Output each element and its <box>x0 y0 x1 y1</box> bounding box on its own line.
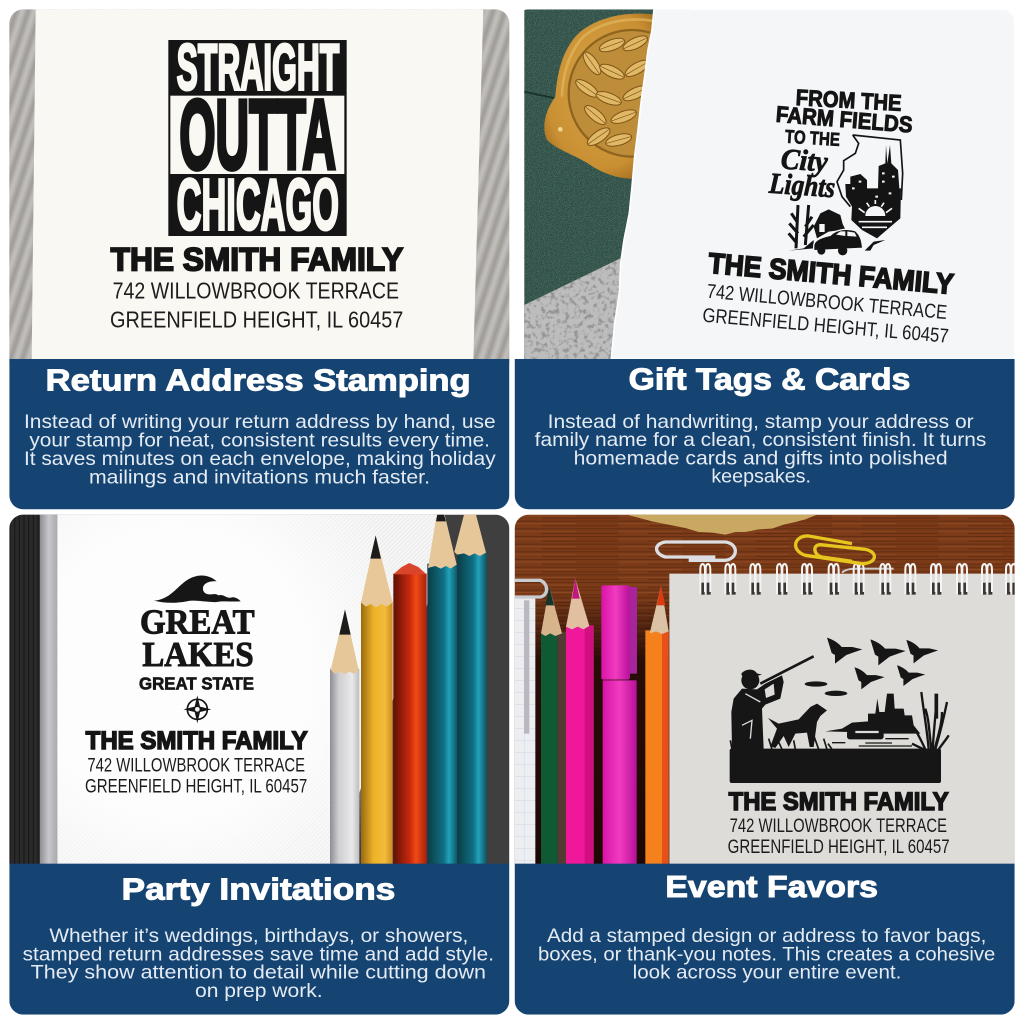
body text: They show attention to detail while cutting down <box>31 963 486 984</box>
body text: your stamp for neat, consistent results every time. <box>29 431 490 452</box>
stamp text: family name and address: THE SMITH FAMILY <box>111 240 404 277</box>
caption band <box>9 359 509 509</box>
icon: compass rose <box>183 695 211 723</box>
illustration: reeds and grass <box>730 692 949 749</box>
stamp text: family name and address: THE SMITH FAMILY <box>707 248 955 301</box>
icon: gold wax seal <box>544 14 653 179</box>
body text: mailings and invitations much faster. <box>89 467 430 488</box>
stamp graphic: hunter, dog and skyline <box>730 638 949 783</box>
icon: orange pencil <box>645 586 669 865</box>
illustration: illinois outline with skyline <box>837 135 903 238</box>
caption band <box>9 864 509 1015</box>
illustration: skyline and boat <box>825 694 920 746</box>
body text <box>538 926 995 984</box>
stamp text: family name and address: 742 WILLOWBROOK TERRACE <box>730 816 947 837</box>
body text: Instead of handwriting, stamp your address or <box>548 412 974 433</box>
stamp text: family name and address: GREENFIELD HEIGHT, IL 60457 <box>702 305 950 348</box>
heading: Event Favors <box>665 870 878 904</box>
body text: family name for a clean, consistent finish. It turns <box>535 430 986 451</box>
stamp graphic: straight outta chicago: OUTTA <box>179 80 336 190</box>
small clip behind rings <box>842 569 894 573</box>
icon: wave <box>154 575 241 603</box>
body text: look across your entire event. <box>633 963 901 984</box>
stamp graphic: farm fields to city lights: City <box>780 143 830 179</box>
stamp text: family name and address: 742 WILLOWBROOK TERRACE <box>706 281 948 324</box>
stamp text: family name and address: 742 WILLOWBROOK TERRACE <box>87 755 305 776</box>
photo: notebook paper and pencils <box>9 515 509 865</box>
stamp text: family name and address: GREENFIELD HEIGHT, IL 60457 <box>110 306 403 332</box>
stamp graphic: farm fields to city lights: FARM FIELDS <box>775 101 914 138</box>
caption band <box>515 864 1015 1015</box>
illustration: hunter with rifle <box>731 656 814 749</box>
heading: Party Invitations <box>122 872 395 906</box>
icon: white paperclip <box>657 542 735 560</box>
photo: notebook on wood desk <box>515 515 1016 865</box>
body text: Whether it’s weddings, birthdays, or showers, <box>49 926 468 947</box>
stamp graphic: straight outta chicago: STRAIGHT <box>177 30 339 103</box>
illustration: flying geese <box>805 638 938 696</box>
body text: keepsakes. <box>711 467 811 488</box>
stamp text: family name and address: 742 WILLOWBROOK TERRACE <box>113 277 399 303</box>
icon: red pencil <box>393 563 427 865</box>
body text <box>23 926 494 1002</box>
icon: pink pencil <box>566 579 594 865</box>
body text: Add a stamped design or address to favor bags, <box>547 926 986 947</box>
panel: party invitations <box>9 515 509 1015</box>
body text <box>535 412 986 488</box>
body text: stamped return addresses save time and add style. <box>23 944 494 965</box>
stamp graphic: straight outta chicago <box>168 30 347 246</box>
illustration: ground band <box>730 749 941 783</box>
stamp graphic: farm fields to city lights: TO THE <box>784 126 841 150</box>
stamp graphic: farm fields to city lights: FROM THE <box>795 84 902 116</box>
body text: It saves minutes on each envelope, making holiday <box>24 449 496 470</box>
photo: cream card on grey knit <box>7 7 513 363</box>
icon: yellow pencil <box>361 535 393 865</box>
body text <box>24 412 496 488</box>
heading: Gift Tags & Cards <box>629 362 910 396</box>
stamp graphic: great lakes great state: GREAT STATE <box>139 674 254 694</box>
icon: grid paper with clip <box>515 580 547 865</box>
body text: boxes, or thank-you notes. This creates a cohesive <box>538 944 995 965</box>
icon: yellow paperclip <box>796 536 874 564</box>
stamp graphic: farm fields to city lights <box>767 84 914 255</box>
body text: Instead of writing your return address by hand, use <box>24 412 496 433</box>
stamp text: family name and address <box>110 240 404 332</box>
stamp text: family name and address: THE SMITH FAMILY <box>86 727 308 755</box>
body text: on prep work. <box>195 981 323 1002</box>
stamp graphic: great lakes great state: LAKES <box>142 635 254 674</box>
heading: Return Address Stamping <box>46 364 471 398</box>
icon: teal pencils <box>427 515 487 865</box>
stamp graphic: great lakes great state <box>139 575 255 723</box>
body text: homemade cards and gifts into polished <box>574 448 948 469</box>
panel: event favors <box>515 515 1016 1015</box>
caption band <box>515 359 1015 509</box>
spiral binding rings <box>700 564 1016 595</box>
illustration: dog <box>768 704 827 748</box>
stamp text: family name and address: GREENFIELD HEIGHT, IL 60457 <box>85 777 307 798</box>
stamp graphic: farm fields to city lights: Lights <box>767 168 836 204</box>
stamp graphic: great lakes great state: GREAT <box>140 603 255 642</box>
panel: gift tags and cards <box>515 9 1015 509</box>
icon: green pencil <box>541 587 568 865</box>
icon: white pencil <box>330 609 359 865</box>
stamp text: family name and address: GREENFIELD HEIGHT, IL 60457 <box>728 837 950 858</box>
photo: wax seal and torn paper <box>524 9 1015 359</box>
stamp text: family name and address <box>702 248 955 348</box>
illustration: barn corn and car <box>789 205 885 255</box>
stamp text: family name and address <box>728 788 950 858</box>
stamp text: family name and address <box>85 727 308 798</box>
stamp text: family name and address: THE SMITH FAMILY <box>729 788 949 816</box>
panel: return address stamping <box>7 7 513 509</box>
icon: magenta marker <box>601 585 637 865</box>
stamp graphic: straight outta chicago: CHICAGO <box>177 166 339 246</box>
spiral notebook page <box>669 564 1016 865</box>
